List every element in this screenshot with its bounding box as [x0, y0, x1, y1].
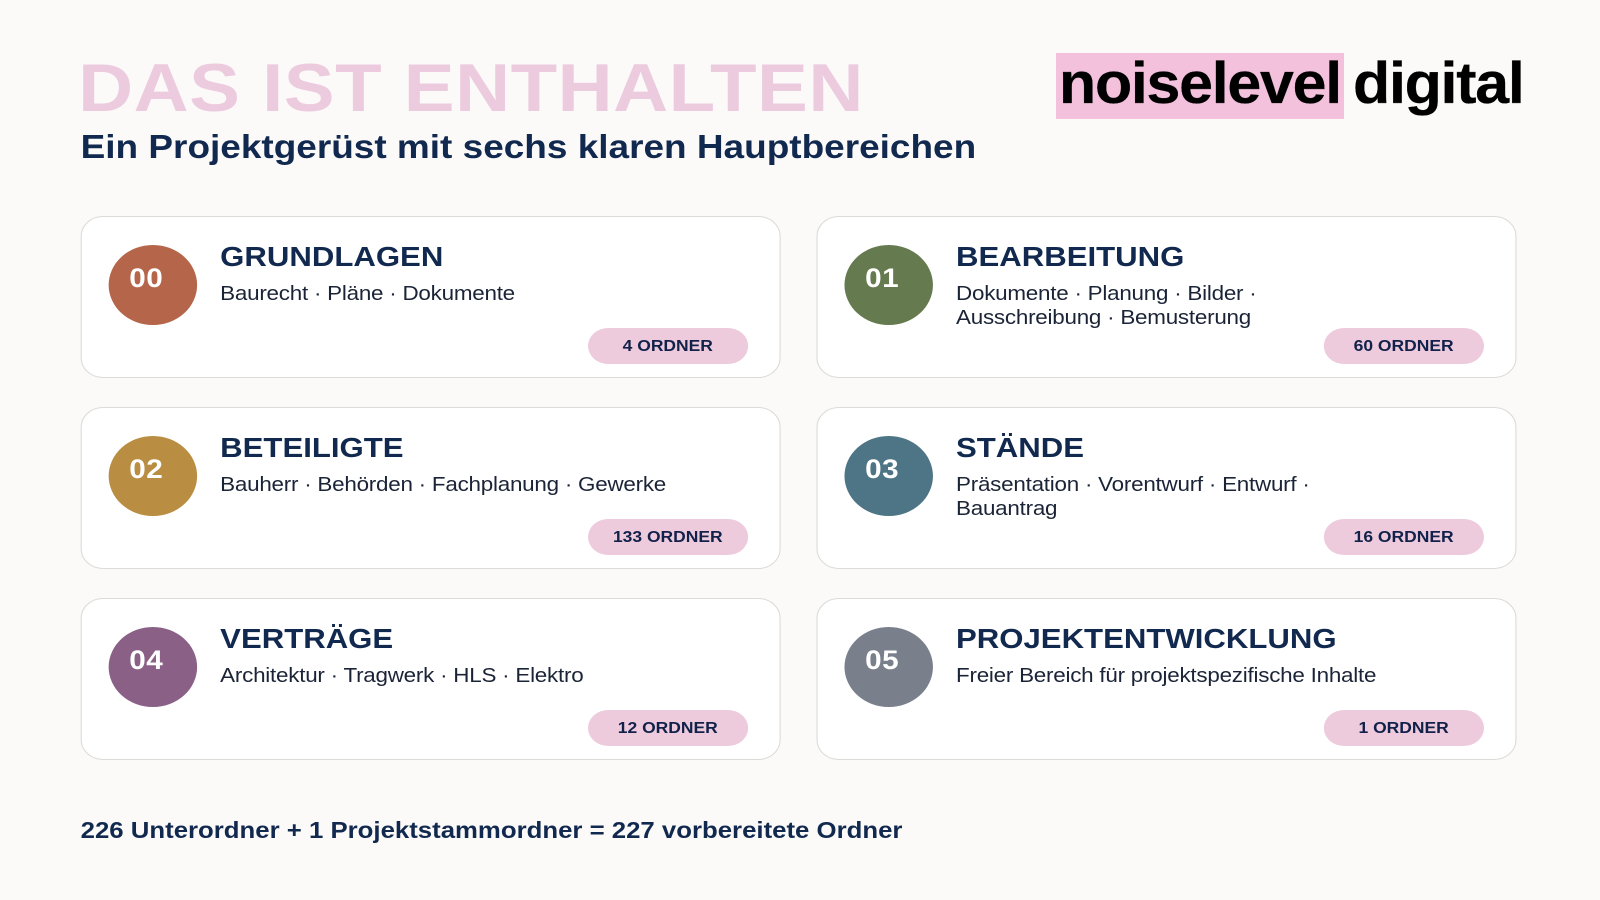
folder count — [587, 328, 748, 364]
subtitle: Ein Projektgerüst mit sechs klaren Hauptbereichen — [81, 128, 976, 165]
description — [956, 474, 1310, 520]
description: Bauantrag — [956, 498, 1057, 520]
heading: STÄNDE — [956, 432, 1084, 462]
badge 00: 00 — [129, 262, 163, 292]
description: Ausschreibung · Bemusterung — [956, 307, 1251, 329]
folder count — [1323, 328, 1484, 364]
folder count — [587, 519, 748, 555]
badge 00 — [108, 244, 197, 324]
badge 01: 01 — [865, 262, 899, 292]
description: Freier Bereich für projektspezifische Inhalte — [956, 665, 1376, 687]
badge 03 — [844, 436, 933, 516]
heading: GRUNDLAGEN — [220, 240, 443, 272]
description: Architektur · Tragwerk · HLS · Elektro — [220, 665, 583, 687]
logo word: digital: digital — [1353, 51, 1523, 116]
badge 05: 05 — [865, 644, 899, 674]
badge 02: 02 — [129, 454, 163, 484]
badge 03: 03 — [865, 454, 899, 484]
folder count — [1323, 519, 1484, 555]
folder count — [587, 710, 748, 746]
panel: 04 Verträge — [80, 598, 780, 760]
logo highlight: noiselevel: noiselevel — [1059, 51, 1341, 116]
badge 05 — [844, 626, 933, 706]
heading: PROJEKTENTWICKLUNG — [956, 622, 1337, 654]
logo — [1056, 51, 1523, 119]
folder count: 1 ORDNER — [1359, 720, 1449, 737]
panel: 02 Beteiligte — [80, 407, 780, 569]
footer summary: 226 Unterordner + 1 Projektstammordner = 227 vorbereitete Ordner — [81, 817, 902, 843]
folder count: 16 ORDNER — [1354, 529, 1454, 546]
badge 04 — [108, 626, 197, 706]
panel: 01 Bearbeitung — [816, 216, 1516, 378]
folder count: 4 ORDNER — [623, 338, 713, 355]
folder count: 12 ORDNER — [618, 720, 718, 737]
description: Präsentation · Vorentwurf · Entwurf · — [956, 474, 1310, 496]
description — [956, 283, 1256, 329]
panel: 03 Stände — [816, 407, 1516, 569]
heading: BEARBEITUNG — [956, 240, 1184, 272]
badge 04: 04 — [129, 644, 163, 674]
description: Bauherr · Behörden · Fachplanung · Gewerke — [220, 474, 666, 496]
badge 01 — [844, 244, 933, 324]
description: Dokumente · Planung · Bilder · — [956, 283, 1256, 305]
folder count — [1323, 710, 1484, 746]
folder count: 60 ORDNER — [1354, 338, 1454, 355]
panel: 00 Grundlagen — [80, 216, 780, 378]
folder count: 133 ORDNER — [613, 529, 723, 546]
title: DAS IST ENTHALTEN — [78, 50, 864, 126]
heading: VERTRÄGE — [220, 622, 393, 654]
badge 02 — [108, 436, 197, 516]
heading: BETEILIGTE — [220, 432, 404, 462]
description: Baurecht · Pläne · Dokumente — [220, 283, 515, 305]
panel: 05 Projektentwicklung — [816, 598, 1516, 760]
